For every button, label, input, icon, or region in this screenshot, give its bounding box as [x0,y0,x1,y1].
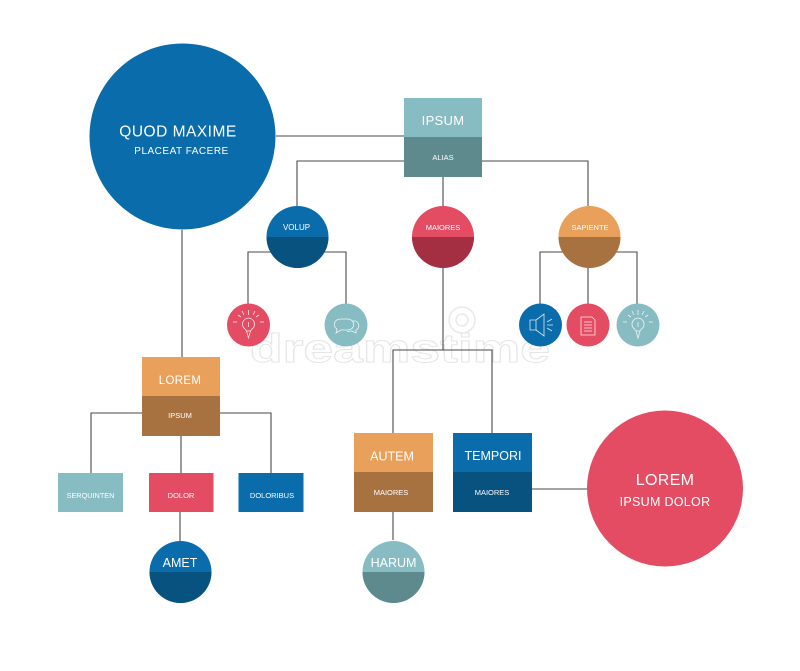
icon: document on red circle [566,304,610,346]
circle: harum: HARUM [371,556,416,570]
circle: quod maxime: QUOD MAXIME [119,124,237,140]
circle: amet: AMET [163,556,198,570]
circle: quod maxime [90,44,276,230]
box: serquinten [58,473,123,512]
box: ipsum alias: ALIAS [432,153,454,162]
circle: sapiente: SAPIENTE [571,223,609,232]
circle: maiores: MAIORES [426,223,460,232]
circle: amet [150,541,212,603]
circle: maiores [412,206,474,268]
box: tempori maiores: TEMPORI [465,449,521,463]
box: lorem ipsum [142,357,220,436]
watermark [250,307,550,371]
circle: volup: VOLUP [283,223,310,232]
icon: speech bubbles on teal circle [324,304,368,346]
circle: lorem ipsum dolor: LOREM [636,472,694,489]
box: autem maiores [354,433,433,512]
circle: volup [266,206,328,268]
box: tempori maiores: MAIORES [475,488,509,497]
watermark: dreamstime [250,327,550,371]
box: doloribus [238,473,304,512]
box: dolor: DOLOR [168,491,195,500]
circle: quod maxime: PLACEAT FACERE [134,146,229,157]
box: lorem ipsum: IPSUM [168,411,192,420]
box: ipsum alias [404,98,482,177]
box: serquinten: SERQUINTEN [67,491,114,500]
box: autem maiores: AUTEM [370,450,414,464]
circle: sapiente [558,206,620,268]
circle: harum [362,541,424,603]
box: autem maiores: MAIORES [374,488,408,497]
box: dolor [149,473,214,512]
icon: megaphone on blue circle [519,304,562,346]
box: doloribus: DOLORIBUS [250,491,294,500]
box: tempori maiores [453,433,532,512]
icon: light bulb on red circle [227,304,270,346]
circle: lorem ipsum dolor: IPSUM DOLOR [620,495,710,509]
box: lorem ipsum: LOREM [159,375,201,387]
connector lines [91,136,637,541]
circle: lorem ipsum dolor [587,410,743,566]
icon: light bulb on teal circle [616,304,660,346]
box: ipsum alias: IPSUM [422,113,464,128]
